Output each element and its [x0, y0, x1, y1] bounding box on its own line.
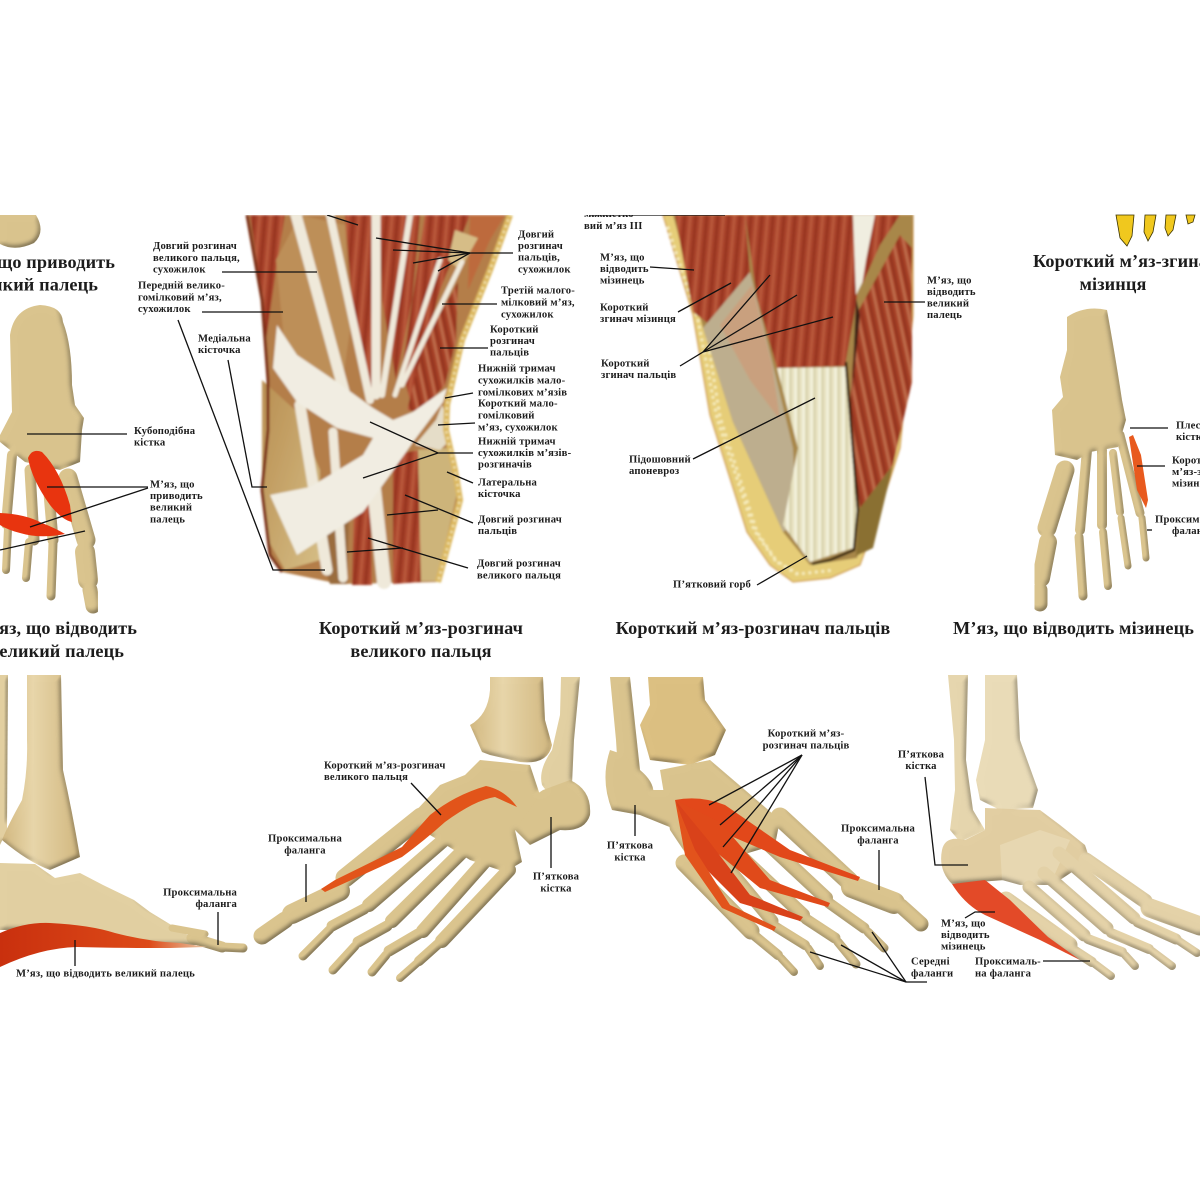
- label: peroneus tertius: сухожилок: [501, 310, 554, 320]
- leaders: [178, 215, 513, 570]
- panel: abductor digiti minimi side view: [898, 675, 1200, 979]
- label: adductor hallucis: великий: [150, 503, 192, 514]
- label: inferior extensor retinaculum: сухожилків м’язів-: [478, 448, 572, 459]
- label: extensor digitorum brevis: розгинач: [490, 336, 535, 347]
- leaders: [306, 783, 551, 902]
- label: lateral malleolus: Латеральна: [478, 478, 537, 488]
- foot skeleton, adductor: [0, 305, 93, 606]
- label: flexor digiti minimi brevis: Короткий: [600, 302, 649, 314]
- panel: abductor hallucis side view: [0, 675, 243, 980]
- label: extensor hallucis longus tendon: Довгий розгинач: [153, 241, 237, 252]
- panel: adductor hallucis foot (top left): [0, 215, 203, 661]
- panel: extensor hallucis brevis foot view: [262, 677, 590, 978]
- heading: extensor hallucis brevis: великого пальця: [350, 641, 492, 661]
- label: peroneus brevis tendon: Короткий мало-: [478, 398, 558, 410]
- heading: flexor digiti minimi: мізинця: [1080, 274, 1146, 294]
- label: abductor hallucis: М’яз, що: [927, 276, 972, 286]
- label: inferior peroneal retinaculum: Нижній тримач: [478, 364, 556, 374]
- label: cuboid: кістка: [134, 438, 166, 448]
- label: extensor hallucis brevis: Короткий м’яз-розгинач: [324, 760, 446, 772]
- label: proximal phalanx: Проксимальна: [841, 824, 915, 834]
- leaders: [75, 912, 218, 966]
- label: inferior peroneal retinaculum: гомілкових м’язів: [478, 388, 567, 398]
- leaders: [925, 777, 1090, 961]
- panel: extensor digitorum brevis foot view: [605, 677, 953, 982]
- label: calcaneus: кістка: [540, 883, 572, 894]
- label: abductor digiti minimi: М’яз, що: [600, 252, 645, 264]
- label: extensor hallucis brevis: великого пальця: [324, 772, 408, 783]
- muscle: adductor oblique head: [28, 451, 72, 522]
- label: calcaneus: кістка: [905, 761, 937, 772]
- leaders: [0, 434, 148, 550]
- label: proximal phalanx: фаланга: [195, 899, 238, 910]
- label: peroneus tertius: Третій малого-: [501, 286, 575, 296]
- label: plantar aponeurosis: апоневроз: [629, 466, 680, 477]
- heading: extensor digitorum brevis: Короткий м’яз-розгинач пальців: [616, 618, 890, 638]
- label: lateral malleolus: кісточка: [478, 489, 521, 500]
- label: extensor hallucis longus: Довгий розгинач: [477, 558, 561, 570]
- label: proximal phalanx: на фаланга: [975, 968, 1032, 979]
- muscle: adductor transverse head: [0, 513, 65, 536]
- label: abductor digiti minimi: М’яз, що: [941, 918, 986, 930]
- skeleton, medial view: [0, 675, 243, 948]
- label: medial malleolus: Медіальна: [198, 334, 251, 344]
- label: extensor digitorum brevis: пальців: [490, 348, 529, 359]
- label: middle phalanges: Середні: [911, 956, 950, 968]
- label: abductor digiti minimi: відводить: [600, 264, 649, 275]
- label: extensor digitorum longus tendon: сухожилок: [518, 264, 571, 275]
- label: extensor digitorum longus tendon: розгинач: [518, 241, 563, 252]
- label: extensor digitorum longus tendon: Довгий: [518, 230, 554, 240]
- label: abductor digiti minimi: мізинець: [941, 942, 986, 953]
- label: abductor hallucis: великий: [927, 298, 969, 310]
- skeleton, dorsal lateral view: [605, 677, 921, 972]
- muscle: abductor digiti minimi: [952, 880, 1080, 960]
- icon: toe fragment above the title: [0, 215, 41, 248]
- label: extensor hallucis longus tendon: великого пальця,: [153, 253, 240, 264]
- label: proximal phalanx: Проксимальна: [268, 834, 342, 844]
- label: tibialis anterior tendon: сухожилок: [138, 304, 191, 315]
- label: abductor hallucis: палець: [927, 310, 962, 321]
- panel: plantar dissection: [584, 209, 976, 638]
- leaders: [590, 215, 925, 585]
- label: proximal phalanx: Проксималь-: [975, 956, 1041, 968]
- label: calcaneus: П’яткова: [533, 872, 579, 882]
- white crop above the illustrations: [0, 0, 1200, 215]
- muscle: abductor hallucis: [0, 923, 207, 967]
- label: plantar aponeurosis: Підошовний: [629, 454, 691, 466]
- panel: flexor and abductor digiti minimi foot (top right): [953, 215, 1200, 638]
- label: proximal phalanx: фаланга: [857, 835, 899, 846]
- label: extensor digitorum brevis: Короткий м’яз-: [768, 728, 844, 740]
- panel: extensor dissection: [138, 215, 575, 661]
- skeleton, lateral view: [941, 675, 1200, 976]
- label: extensor hallucis longus: великого пальця: [477, 570, 561, 581]
- label: medial malleolus: кісточка: [198, 345, 241, 356]
- muscle: extensor hallucis brevis: [321, 786, 517, 892]
- label: adductor hallucis: М’яз, що: [150, 480, 195, 490]
- label: tibialis anterior tendon: гомілковий м’яз,: [138, 292, 222, 303]
- label: cuboid: Кубоподібна: [134, 426, 195, 437]
- heading: abductor digiti minimi: М’яз, що відводить мізинець: [953, 618, 1194, 638]
- label: extensor digitorum longus: Довгий розгинач: [478, 514, 562, 526]
- label: abductor hallucis: М’яз, що відводить великий палець: [16, 968, 195, 980]
- heading: extensor hallucis brevis: Короткий м’яз-розгинач: [319, 618, 523, 638]
- label: abductor digiti minimi: відводить: [941, 930, 990, 941]
- label: inferior extensor retinaculum: розгиначів: [478, 460, 532, 471]
- label: abductor digiti minimi: мізинець: [600, 276, 645, 287]
- label: extensor digitorum longus: пальців: [478, 526, 517, 537]
- label: abductor hallucis: відводить: [927, 287, 976, 298]
- label: calcaneus: кістка: [614, 852, 646, 863]
- leaders: [1130, 428, 1168, 530]
- label: peroneus tertius: мілковий м’яз,: [501, 298, 575, 308]
- label: inferior peroneal retinaculum: сухожилків мало-: [478, 376, 566, 386]
- label: peroneus brevis tendon: гомілковий: [478, 410, 535, 422]
- label: calcaneal tuberosity: П’ятковий горб: [673, 580, 751, 590]
- label: proximal phalanx: Проксимальна: [163, 888, 237, 898]
- label: adductor hallucis: палець: [150, 514, 185, 525]
- label: flexor digiti minimi brevis: згинач мізинця: [600, 314, 676, 325]
- label: proximal phalanx: фаланга: [284, 845, 326, 856]
- label: dorsal interosseous: міжкістко-: [584, 209, 638, 220]
- label: extensor digitorum brevis: розгинач пальців: [763, 740, 850, 751]
- icon: yellow toe fragments: [1116, 215, 1195, 246]
- label: calcaneus: П’яткова: [607, 840, 653, 852]
- label: flexor digitorum brevis: Короткий: [601, 358, 650, 370]
- skeleton, dorsal view: [262, 677, 590, 978]
- label: inferior extensor retinaculum: Нижній тримач: [478, 436, 556, 448]
- label: adductor hallucis: приводить: [150, 491, 203, 502]
- label: extensor digitorum longus tendon: пальців,: [518, 253, 560, 264]
- muscle: extensor digitorum brevis: [675, 798, 860, 931]
- muscle: abductor digiti minimi: [1129, 435, 1148, 508]
- label: dorsal interosseous: вий м’яз ІІІ: [584, 221, 643, 232]
- dissection illustration: [247, 215, 510, 585]
- label: middle phalanges: фаланги: [911, 968, 953, 979]
- leaders: [635, 755, 927, 982]
- plantar illustration: [663, 215, 913, 582]
- label: extensor hallucis longus tendon: сухожилок: [153, 265, 206, 276]
- label: calcaneus: П’яткова: [898, 750, 944, 760]
- foot skeleton, abductor digiti minimi: [1040, 309, 1146, 604]
- label: flexor digitorum brevis: згинач пальців: [601, 370, 676, 381]
- label: peroneus brevis tendon: м’яз, сухожилок: [478, 422, 559, 434]
- label: tibialis anterior tendon: Передній велико-: [138, 280, 225, 292]
- label: extensor digitorum brevis: Короткий: [490, 324, 539, 336]
